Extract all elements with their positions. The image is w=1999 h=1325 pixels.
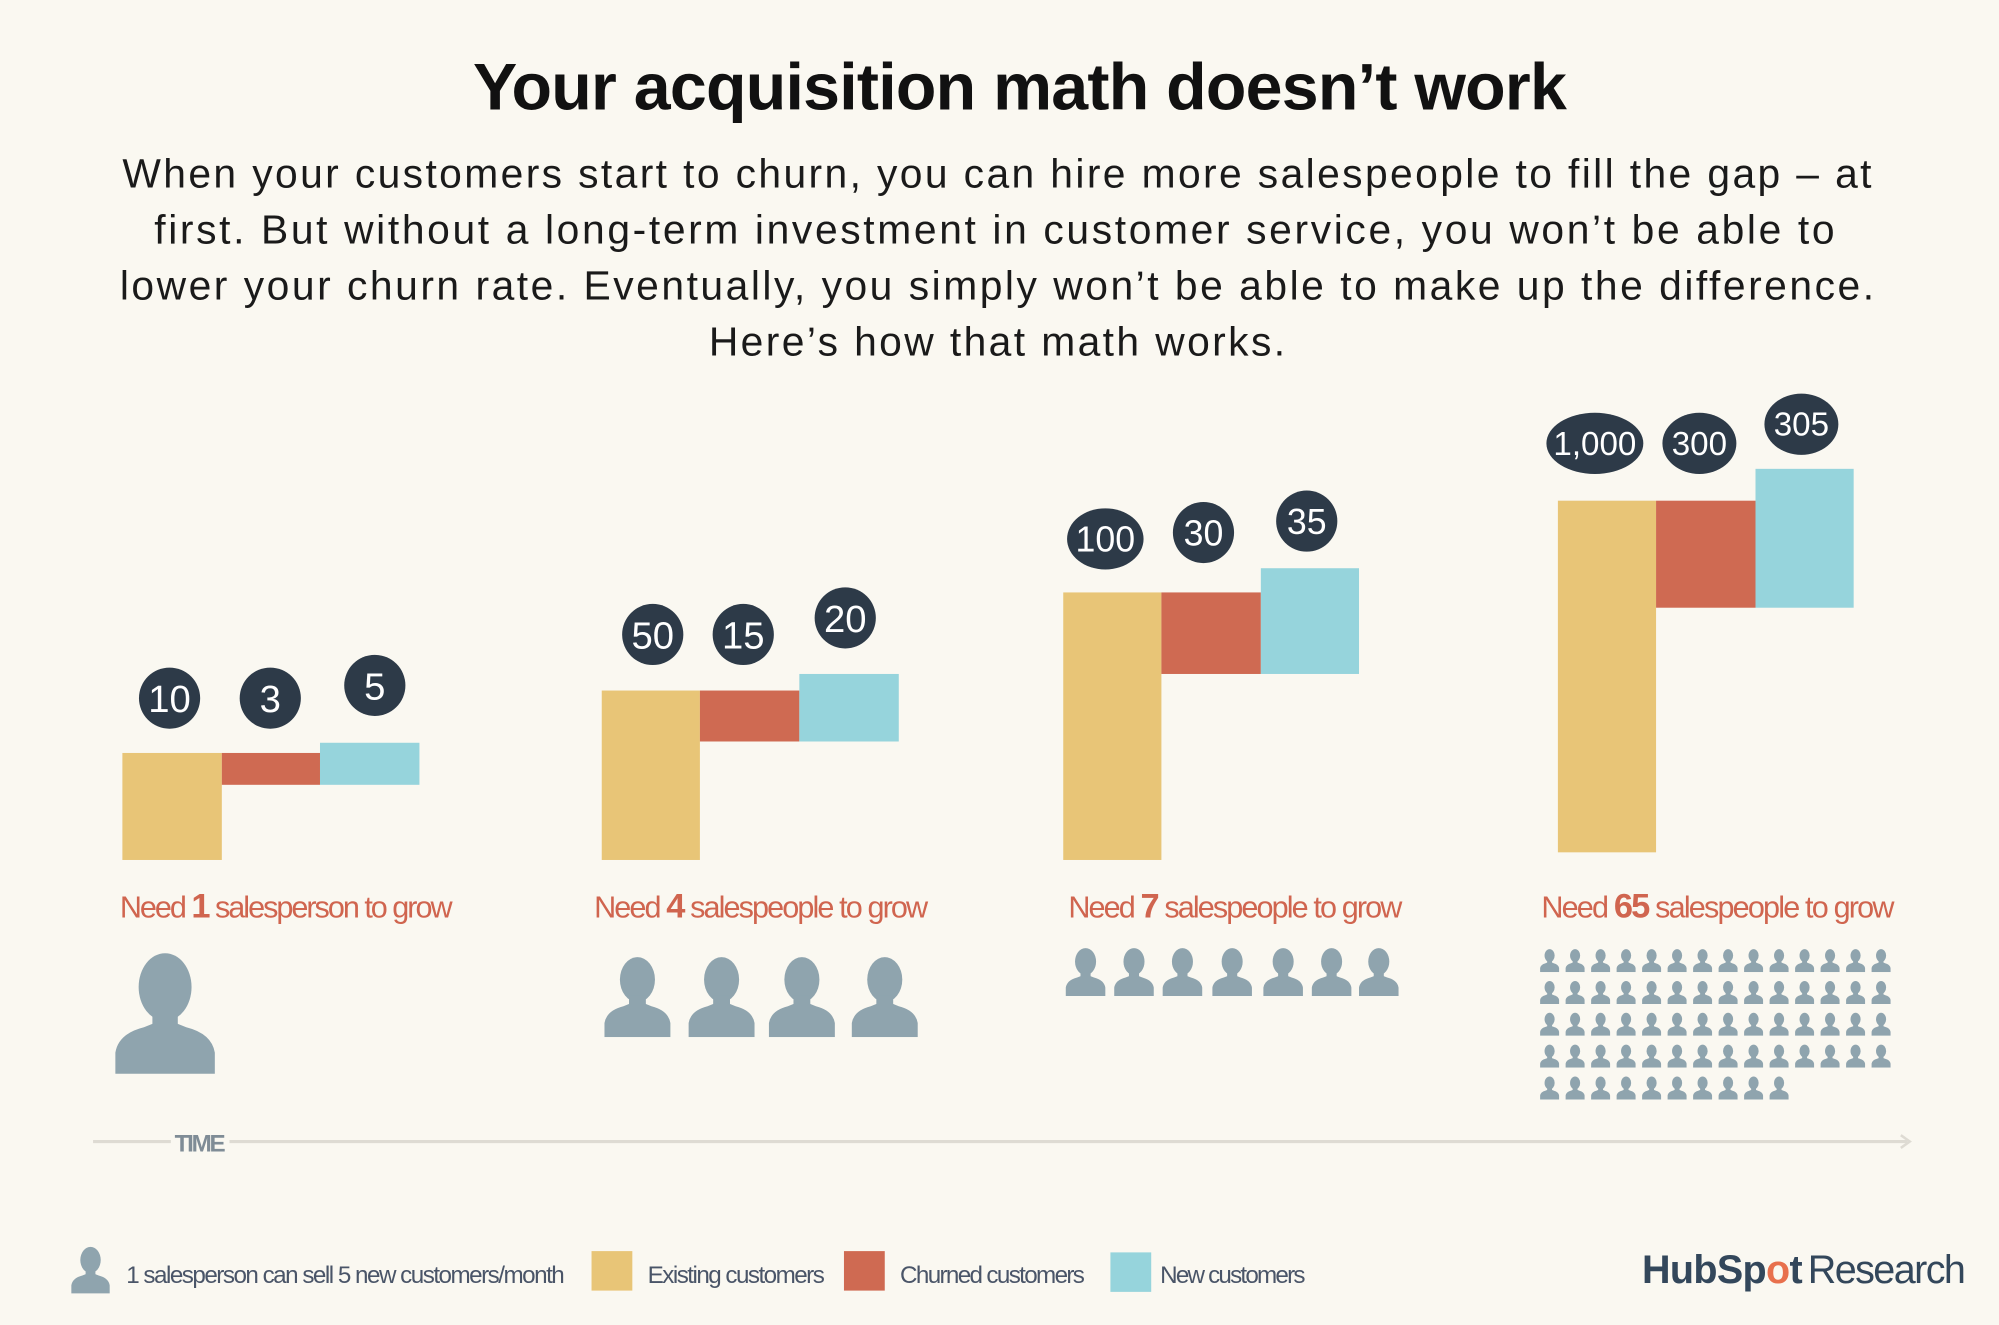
intro paragraph: Here’s how that math works.: [709, 318, 1285, 364]
legend: Existing customers: [648, 1262, 825, 1289]
time axis arrow: [93, 1128, 1910, 1158]
people group 4: [1540, 949, 1891, 1099]
chart group 3: 35: [1287, 502, 1327, 542]
chart group 1: 5: [364, 665, 385, 708]
labels: Need 7 salespeople to grow: [1068, 887, 1403, 925]
intro paragraph: lower your churn rate. Eventually, you simply won’t be able to make up the difference.: [120, 262, 1874, 308]
chart group 4: 305: [1774, 407, 1829, 444]
people group 1: [115, 953, 215, 1074]
chart group 1: 10: [148, 678, 191, 721]
chart group 2: 20: [824, 598, 867, 641]
title: Your acquisition math doesn’t work: [473, 51, 1567, 125]
legend: 1 salesperson can sell 5 new customers/month: [126, 1262, 565, 1289]
people group 2: [604, 957, 918, 1037]
chart group 4: [1546, 394, 1854, 852]
people group 3: [1066, 948, 1399, 996]
chart group 2: 15: [722, 614, 765, 657]
logo: HubSpot Research: [1642, 1248, 1966, 1292]
labels: Need 65 salespeople to grow: [1541, 887, 1895, 925]
time axis arrow: TIME: [175, 1131, 226, 1158]
chart group 3: [1063, 491, 1359, 860]
icon: legend person: [71, 1247, 110, 1293]
chart group 4: 300: [1672, 426, 1727, 463]
chart group 2: [602, 587, 899, 860]
chart group 1: 3: [260, 678, 281, 721]
chart group 1: [122, 655, 419, 860]
labels: [120, 887, 1895, 925]
logo: HubSpot Research: HubSpot: [1642, 1248, 1803, 1292]
labels: Need 4 salespeople to grow: [594, 887, 929, 925]
labels: Need 1 salesperson to grow: [120, 887, 453, 925]
legend: [71, 1247, 1305, 1293]
logo: HubSpot Research: Research: [1808, 1248, 1966, 1292]
intro paragraph: [120, 150, 1874, 364]
chart group 3: 30: [1184, 513, 1223, 553]
legend: Churned customers: [900, 1262, 1085, 1289]
legend: New customers: [1160, 1262, 1305, 1289]
intro paragraph: first. But without a long-term investment in customer service, you won’t be able to: [154, 206, 1835, 252]
intro paragraph: When your customers start to churn, you can hire more salespeople to fill the gap – at: [122, 150, 1872, 196]
chart group 3: 100: [1076, 520, 1135, 560]
chart group 2: 50: [631, 614, 674, 657]
chart group 4: 1,000: [1553, 426, 1636, 463]
